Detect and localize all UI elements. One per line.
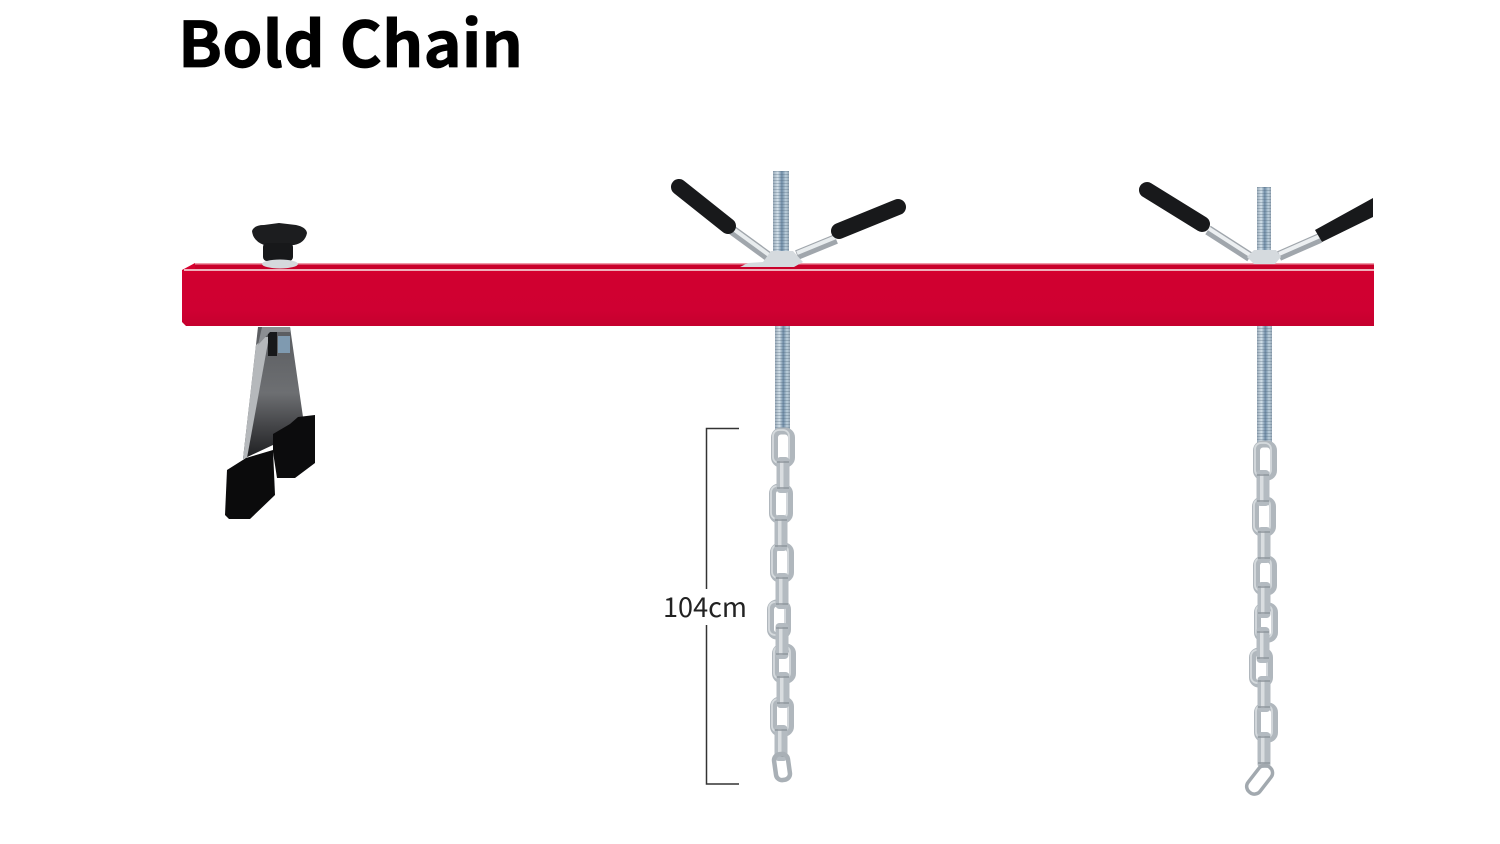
- threaded rod 2 lower: [1257, 325, 1272, 445]
- red beam: [182, 263, 1374, 326]
- chain 1: [769, 430, 792, 781]
- end foot bracket: [225, 327, 315, 519]
- chain 2: [1244, 443, 1275, 797]
- tightening handles 2: [1147, 187, 1373, 264]
- threaded rod 1 lower: [775, 325, 790, 431]
- dimension label: 104cm: [663, 586, 747, 625]
- tightening handles 1: [679, 171, 898, 267]
- knob: [252, 223, 307, 268]
- product: engine support beam: [182, 171, 1374, 519]
- dimension bracket: [706, 428, 739, 784]
